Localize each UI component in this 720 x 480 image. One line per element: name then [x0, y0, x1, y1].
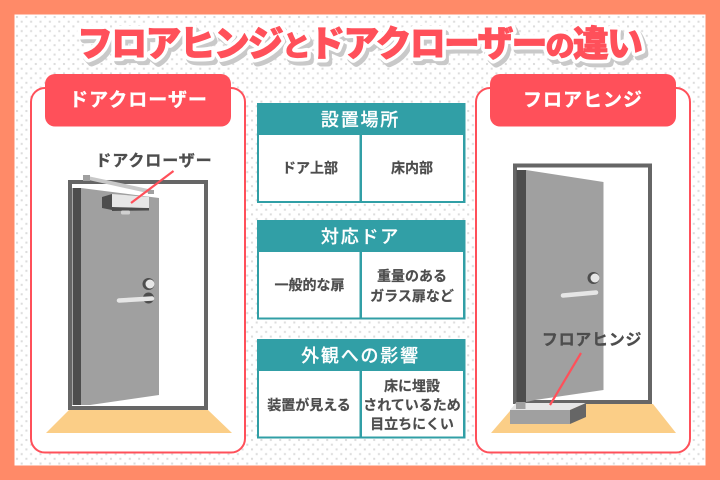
title: フロアヒンジとドアクローザーの違い [77, 23, 643, 64]
tab: floor hinge heading: フロアヒンジ [523, 90, 643, 111]
cell: device visible: 装置が見える [267, 397, 351, 413]
floor mat [46, 410, 232, 433]
door closer arm [83, 175, 154, 194]
tab: door closer heading [45, 74, 231, 126]
cell: embedded in floor: 床に埋設 [384, 378, 440, 394]
cell: embedded in floor [363, 378, 461, 432]
cell: ordinary door: 一般的な扉 [274, 277, 344, 293]
floor hinge box [510, 402, 586, 424]
heading: 対応ドア [321, 227, 400, 247]
door handle [563, 272, 600, 296]
table: installation location [257, 103, 466, 203]
cell: embedded in floor: 目立ちにくい [370, 416, 454, 432]
heading: 設置場所 [321, 110, 400, 130]
door illustration [70, 175, 206, 408]
table: effect on appearance [257, 339, 466, 438]
callout: floor hinge [542, 332, 642, 405]
cell: heavy glass door: 重量のある [377, 268, 447, 284]
cell: embedded in floor: されているため [363, 397, 461, 413]
title: フロアヒンジとドアクローザーの違い [80, 27, 646, 68]
panel: door closer [31, 74, 245, 452]
title: フロアヒンジとドアクローザーの違い [77, 23, 643, 64]
tab: door closer heading: ドアクローザー [69, 89, 208, 111]
callout: floor hinge: フロアヒンジ [542, 332, 642, 349]
door closer body [102, 194, 149, 214]
cell: door top: ドア上部 [282, 160, 338, 176]
door illustration [510, 166, 650, 424]
panel: floor hinge [476, 74, 690, 452]
callout: door closer [95, 152, 213, 203]
heading: 外観への影響 [301, 346, 420, 366]
cell: heavy glass door: ガラス扉など [370, 288, 454, 304]
table: compatible doors [257, 220, 466, 320]
door handle [119, 278, 154, 304]
floor mat [491, 404, 676, 433]
cell: floor inside: 床内部 [391, 160, 433, 176]
tab: floor hinge heading [490, 74, 676, 126]
callout: door closer: ドアクローザー [95, 152, 213, 170]
cell: heavy glass door [370, 268, 454, 304]
